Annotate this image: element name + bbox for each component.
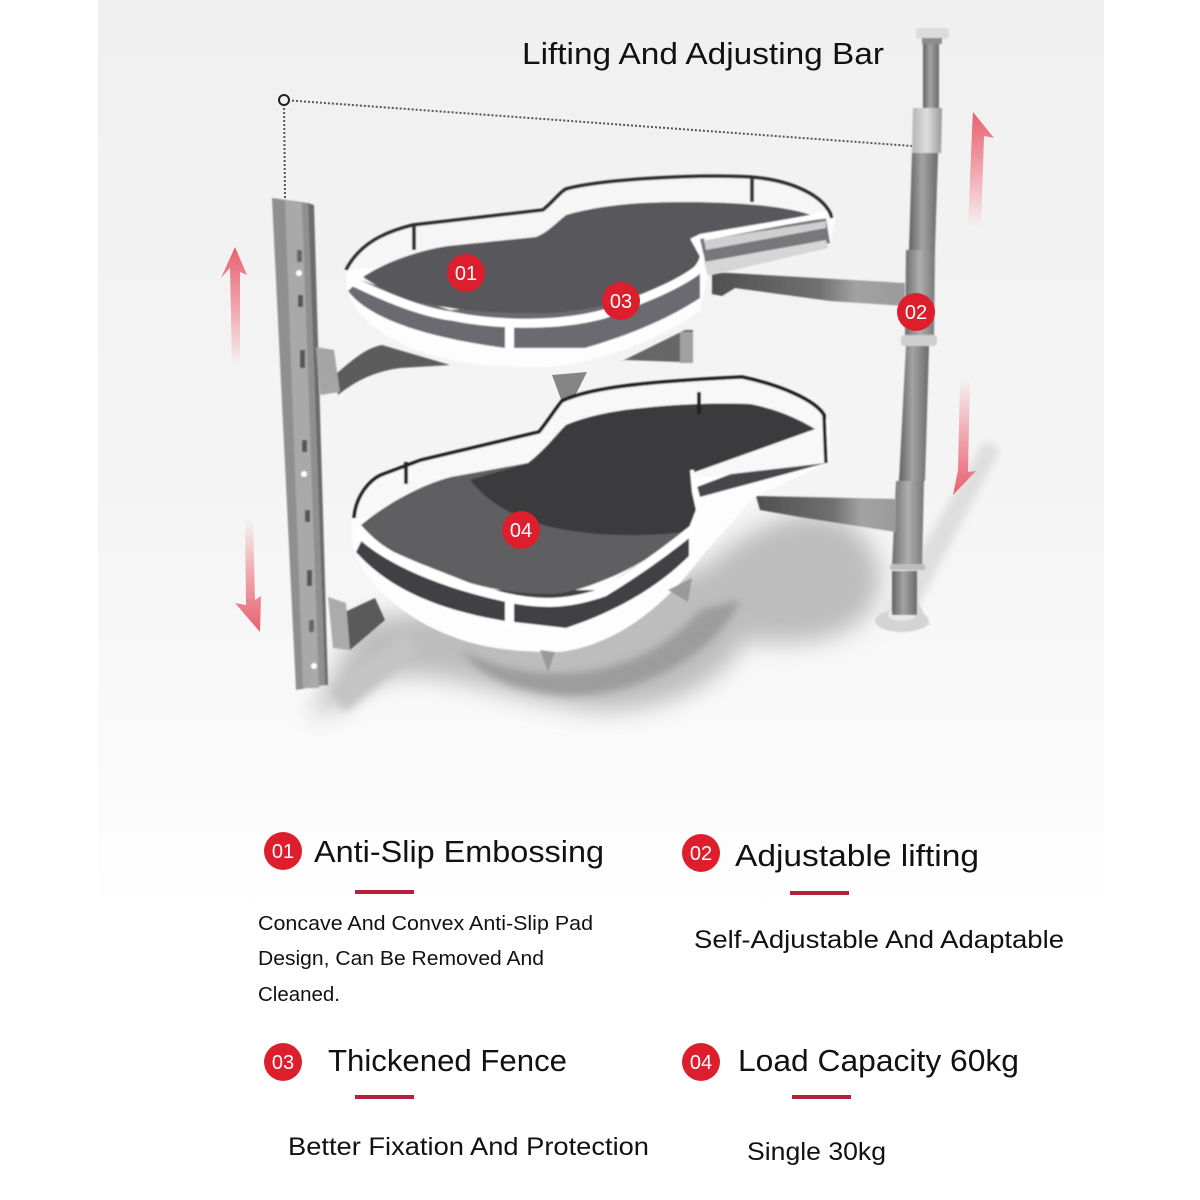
floor shadow xyxy=(310,440,1000,720)
arrow: left down xyxy=(235,520,261,632)
badge 01 on tray xyxy=(447,254,485,292)
badge 02 on pole xyxy=(897,293,935,331)
icon: badge 04: 04 xyxy=(690,1052,712,1074)
tray surface xyxy=(361,404,815,594)
feature 03: thickened fence xyxy=(264,1043,649,1161)
side band xyxy=(348,268,700,348)
dark reflection on surface xyxy=(470,404,815,535)
arrow: left up xyxy=(221,247,247,366)
divider xyxy=(355,890,414,894)
badge 02 on pole: 02 xyxy=(905,302,927,324)
left arm lower xyxy=(328,597,385,650)
left wall bracket xyxy=(272,198,328,690)
badge 04 on lower tray xyxy=(502,511,540,549)
description xyxy=(258,913,593,1006)
tray underside xyxy=(346,200,836,367)
icon: badge 02 xyxy=(682,834,720,872)
icon: badge 03 xyxy=(264,1043,302,1081)
feature 02: adjustable lifting xyxy=(682,834,1064,954)
title: lifting and adjusting bar: Lifting And Adjusting Bar xyxy=(522,36,884,71)
right arms xyxy=(712,272,905,532)
tray underside xyxy=(352,400,830,652)
icon: badge 03: 03 xyxy=(272,1052,294,1074)
tray surface xyxy=(363,202,811,313)
description: Concave And Convex Anti-Slip Pad xyxy=(258,913,593,935)
description: Better Fixation And Protection xyxy=(288,1133,649,1161)
center post xyxy=(552,372,587,402)
upper tray xyxy=(346,176,836,367)
icon: badge 02: 02 xyxy=(690,843,712,865)
feature 01: anti-slip embossing xyxy=(258,832,604,1006)
badge 01 on tray: 01 xyxy=(455,263,477,285)
back rail xyxy=(346,176,832,270)
heading: Load Capacity 60kg xyxy=(738,1043,1019,1078)
right pole: lifting bar xyxy=(875,28,949,632)
right extension band xyxy=(700,218,830,274)
description: Design, Can Be Removed And xyxy=(258,948,544,970)
icon: badge 01 xyxy=(264,832,302,870)
description: Self-Adjustable And Adaptable xyxy=(694,926,1064,954)
side band xyxy=(356,530,689,628)
back rail xyxy=(354,377,826,518)
icon: badge 01: 01 xyxy=(272,841,294,863)
divider xyxy=(355,1095,414,1099)
left arm upper xyxy=(316,330,693,395)
badge 03 on fence: 03 xyxy=(610,291,632,313)
divider xyxy=(792,1095,851,1099)
right extension band xyxy=(696,435,826,497)
heading: Thickened Fence xyxy=(328,1043,567,1078)
badge 03 on fence xyxy=(602,282,640,320)
heading: Anti-Slip Embossing xyxy=(314,834,604,869)
description: Single 30kg xyxy=(747,1138,886,1166)
feature 04: load capacity xyxy=(682,1043,1019,1166)
dotted leader line xyxy=(279,95,912,198)
lower tray xyxy=(352,377,830,672)
description: Cleaned. xyxy=(258,984,340,1006)
heading: Adjustable lifting xyxy=(735,838,979,873)
arrow: right down xyxy=(953,379,976,495)
arrow: right up xyxy=(968,112,994,228)
divider xyxy=(790,891,849,895)
badge 04 on lower tray: 04 xyxy=(510,520,532,542)
icon: badge 04 xyxy=(682,1043,720,1081)
